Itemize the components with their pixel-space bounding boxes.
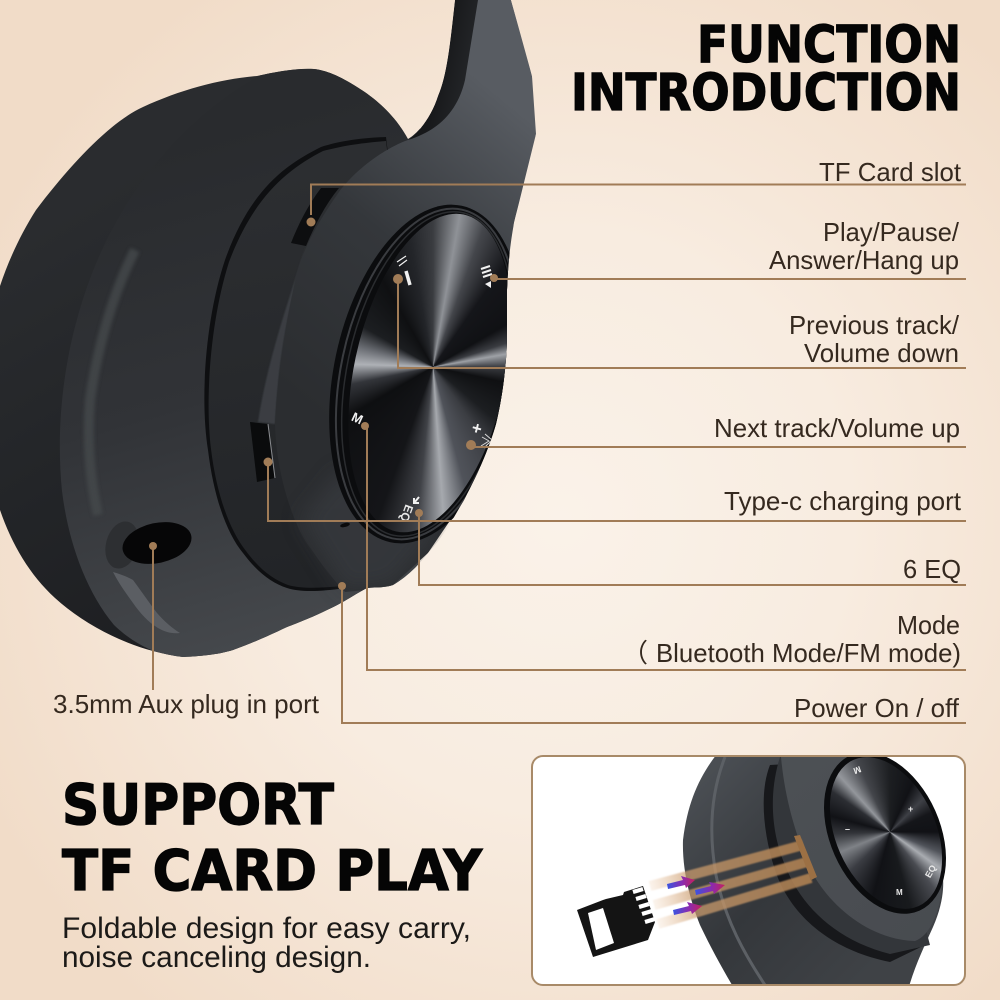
label: 6 EQ: 6 EQ xyxy=(903,554,961,584)
arm and headband xyxy=(275,0,536,592)
callout: aux line xyxy=(152,546,154,690)
panel: disc icons: M xyxy=(896,888,903,897)
label: mode: （ xyxy=(622,638,648,668)
aux recess xyxy=(106,522,136,568)
disc icon: mode: M xyxy=(349,409,365,427)
TF slot xyxy=(291,188,339,246)
label: mode: Bluetooth Mode/FM mode) xyxy=(656,638,961,668)
disc icon: volume up xyxy=(472,424,492,448)
panel: disc icons xyxy=(845,764,938,897)
cushion xyxy=(0,68,400,657)
label: aux: 3.5mm Aux plug in port xyxy=(53,689,320,719)
callout: play pause line xyxy=(494,278,966,280)
callout: power line xyxy=(342,587,966,723)
panel: control disc xyxy=(830,757,942,909)
headband inner shadow xyxy=(408,0,478,140)
mic hole xyxy=(340,522,350,528)
disc icon: EQ: EQ xyxy=(397,503,416,524)
panel: TF card insert xyxy=(531,755,966,986)
label: play pause: Answer/Hang up xyxy=(769,245,959,275)
panel: slot xyxy=(794,835,817,880)
disc icon: volume down xyxy=(397,256,410,285)
callout lines xyxy=(153,184,966,723)
panel: headphone body xyxy=(683,750,943,990)
aux jack xyxy=(122,522,192,564)
panel: inner ring xyxy=(764,760,925,962)
callout: 6 EQ line xyxy=(419,513,966,585)
callout: type-c line xyxy=(268,462,966,521)
title: FUNCTION xyxy=(697,16,961,75)
heading: support TF card play xyxy=(62,773,483,904)
callout: next track line xyxy=(471,446,966,448)
inner hinge recess xyxy=(208,141,387,588)
disc icon: play pause xyxy=(481,266,492,288)
label: TF card slot: TF Card slot xyxy=(819,157,962,187)
hinge light strip xyxy=(258,280,295,424)
label: next track: Next track/Volume up xyxy=(714,413,960,443)
body text: noise canceling design. xyxy=(62,941,371,974)
label: previous track: Previous track/ xyxy=(789,310,960,340)
title: INTRODUCTION xyxy=(571,64,961,123)
panel: shell contour xyxy=(712,757,765,985)
label: mode: Mode xyxy=(897,610,960,640)
title xyxy=(571,16,961,123)
label: previous track: Volume down xyxy=(804,338,959,368)
callout dots xyxy=(149,218,498,590)
label: power: Power On / off xyxy=(794,693,960,723)
panel: disc icons: EQ xyxy=(923,863,938,879)
control disc xyxy=(349,214,508,532)
disc icon: EQ xyxy=(398,496,420,520)
panel: motion streaks xyxy=(650,845,811,924)
panel: disc icons: M xyxy=(852,764,862,776)
callout: TF card slot line xyxy=(311,184,966,215)
callout: mode line xyxy=(367,427,966,670)
label: play pause xyxy=(769,217,960,275)
ear cup shell xyxy=(60,60,420,660)
inner hinge recess ring xyxy=(204,137,388,591)
heading: support TF card play: TF CARD PLAY xyxy=(62,839,483,904)
label: type-c: Type-c charging port xyxy=(724,486,962,516)
panel: disc icons: + xyxy=(908,804,913,814)
panel: inner recess xyxy=(773,757,930,954)
disc icon: volume up: + xyxy=(470,418,484,439)
panel: bezel xyxy=(824,757,946,914)
callout: previous track line xyxy=(398,279,966,368)
label: previous track xyxy=(789,310,960,368)
panel: arm xyxy=(781,757,942,941)
arm lower tone xyxy=(313,486,447,588)
label: mode xyxy=(622,610,961,668)
USB-C port notch xyxy=(250,422,275,482)
body text xyxy=(62,912,471,974)
lower rim highlight xyxy=(113,572,180,633)
heading: support TF card play: SUPPORT xyxy=(62,773,334,838)
panel: TF card xyxy=(577,886,655,957)
label: play pause: Play/Pause/ xyxy=(823,217,960,247)
panel: insertion arrows xyxy=(667,876,725,915)
shell highlight band xyxy=(89,250,135,515)
illustration: headphone ear cup xyxy=(0,0,552,700)
panel: disc icons: – xyxy=(845,824,850,834)
body text: Foldable design for easy carry, xyxy=(62,912,471,945)
bezel xyxy=(329,204,510,544)
